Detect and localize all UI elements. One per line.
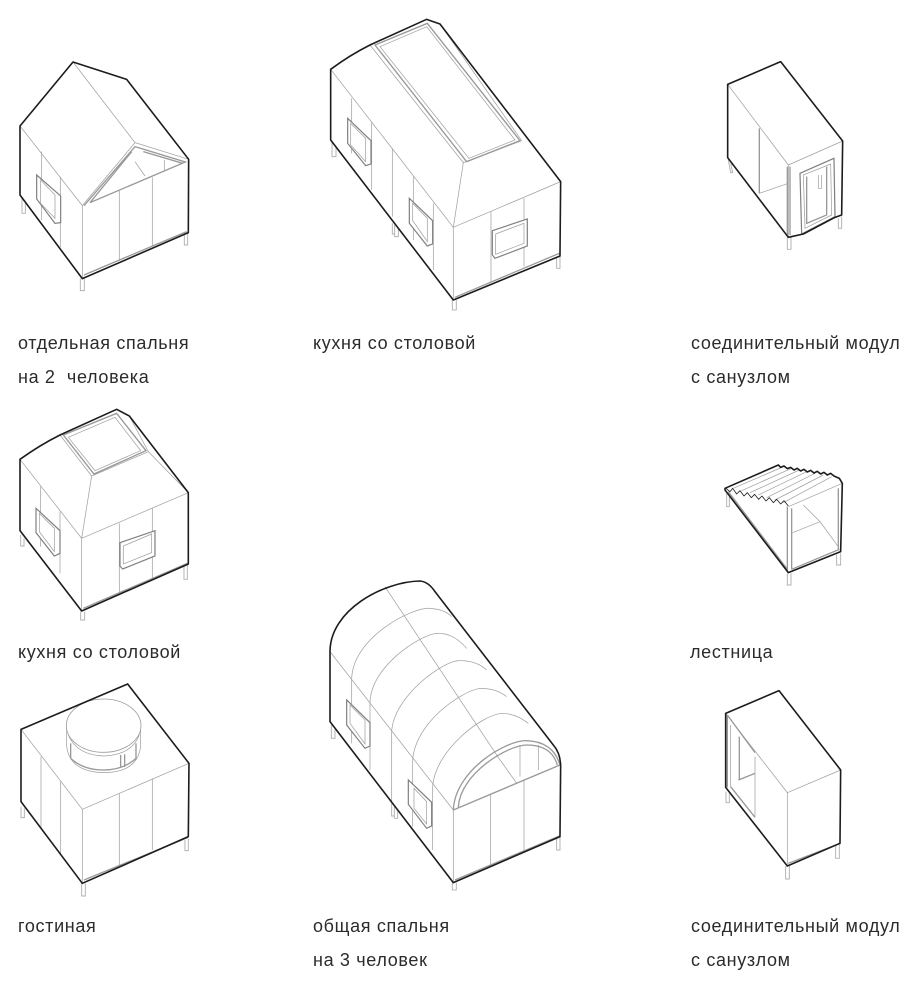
module: staircase [725,465,842,585]
label: living room: гостиная [18,916,96,936]
label: connecting module, side opening [691,916,900,970]
label: bedroom for 2 [18,333,189,387]
label: kitchen with dining room, long: кухня со столовой [313,333,476,353]
label: connecting module, door: соединительный модул [691,333,900,353]
label: shared bedroom for 3: общая спальня [313,916,450,936]
label: connecting module, side opening: соединительный модул [691,916,900,936]
label: staircase: лестница [690,642,773,662]
window [348,118,371,166]
label: shared bedroom for 3 [313,916,450,970]
label: kitchen with dining room, short: кухня со столовой [18,642,181,662]
module: kitchen with dining room, long [331,19,561,310]
module: connecting with bathroom, side opening [726,691,841,879]
door [800,158,835,234]
label: connecting module, door [691,333,900,387]
module: living room [21,684,189,896]
label: bedroom for 2: отдельная спальня [18,333,189,353]
module: kitchen with dining room, short [20,409,188,620]
module: shared bedroom for 3, barrel vault [330,581,561,890]
roof lantern [66,699,141,773]
module: connecting with bathroom, door [728,62,843,249]
label: bedroom for 2: на 2 человека [18,367,149,387]
window [36,508,60,556]
label: shared bedroom for 3: на 3 человек [313,950,428,970]
label: connecting module, side opening: с санузлом [691,950,791,970]
label: connecting module, door: с санузлом [691,367,791,387]
module: bedroom for 2 [20,62,189,291]
window [347,700,370,748]
